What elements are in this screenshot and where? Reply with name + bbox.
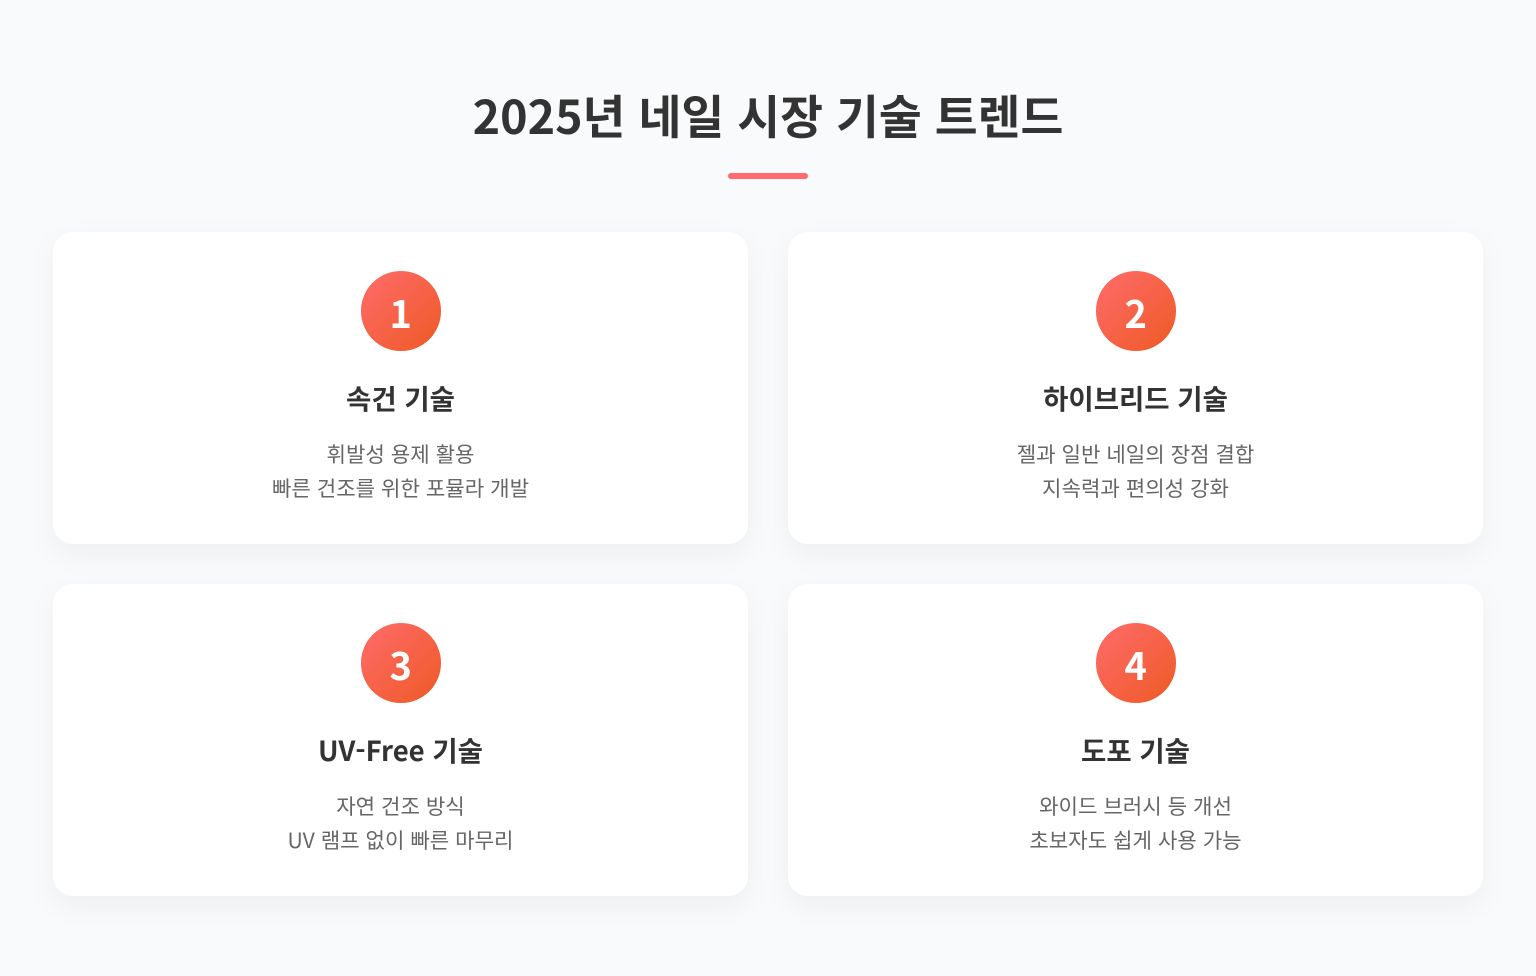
icon: number badge 4: 4 <box>1124 636 1147 691</box>
icon: number badge 1 <box>361 271 441 351</box>
text: description 1: 휘발성 용제 활용 <box>326 438 474 469</box>
text: description 2 <box>1017 438 1254 503</box>
title: 2025년 네일 시장 기술 트렌드 <box>473 80 1063 148</box>
text: description 3 <box>287 790 514 855</box>
text: description 1 <box>272 438 529 503</box>
heading: UV-Free 기술: UV-Free 기술 <box>318 729 483 769</box>
icon: number badge 3 <box>361 623 441 703</box>
text: description 2: 젤과 일반 네일의 장점 결합 <box>1017 438 1254 469</box>
icon: number badge 1: 1 <box>389 284 412 339</box>
text: description 1: 빠른 건조를 위한 포뮬라 개발 <box>272 472 529 503</box>
icon: number badge 3: 3 <box>389 636 412 691</box>
panel: card 2 하이브리드 기술 <box>788 232 1483 544</box>
title underline <box>728 173 808 179</box>
text: description 4: 초보자도 쉽게 사용 가능 <box>1029 824 1242 855</box>
panel: card 4 도포 기술 <box>788 584 1483 896</box>
icon: number badge 4 <box>1096 623 1176 703</box>
text: description 4: 와이드 브러시 등 개선 <box>1039 790 1232 821</box>
heading: 속건 기술: 속건 기술 <box>346 377 455 417</box>
icon: number badge 2 <box>1096 271 1176 351</box>
panel: card 3 UV-Free 기술 <box>53 584 748 896</box>
text: description 3: UV 램프 없이 빠른 마무리 <box>287 824 514 855</box>
panel: card 1 속건 기술 <box>53 232 748 544</box>
heading: 도포 기술: 도포 기술 <box>1081 729 1190 769</box>
text: description 4 <box>1029 790 1242 855</box>
heading: 하이브리드 기술: 하이브리드 기술 <box>1043 377 1228 417</box>
icon: number badge 2: 2 <box>1124 284 1147 339</box>
text: description 2: 지속력과 편의성 강화 <box>1042 472 1229 503</box>
text: description 3: 자연 건조 방식 <box>336 790 465 821</box>
